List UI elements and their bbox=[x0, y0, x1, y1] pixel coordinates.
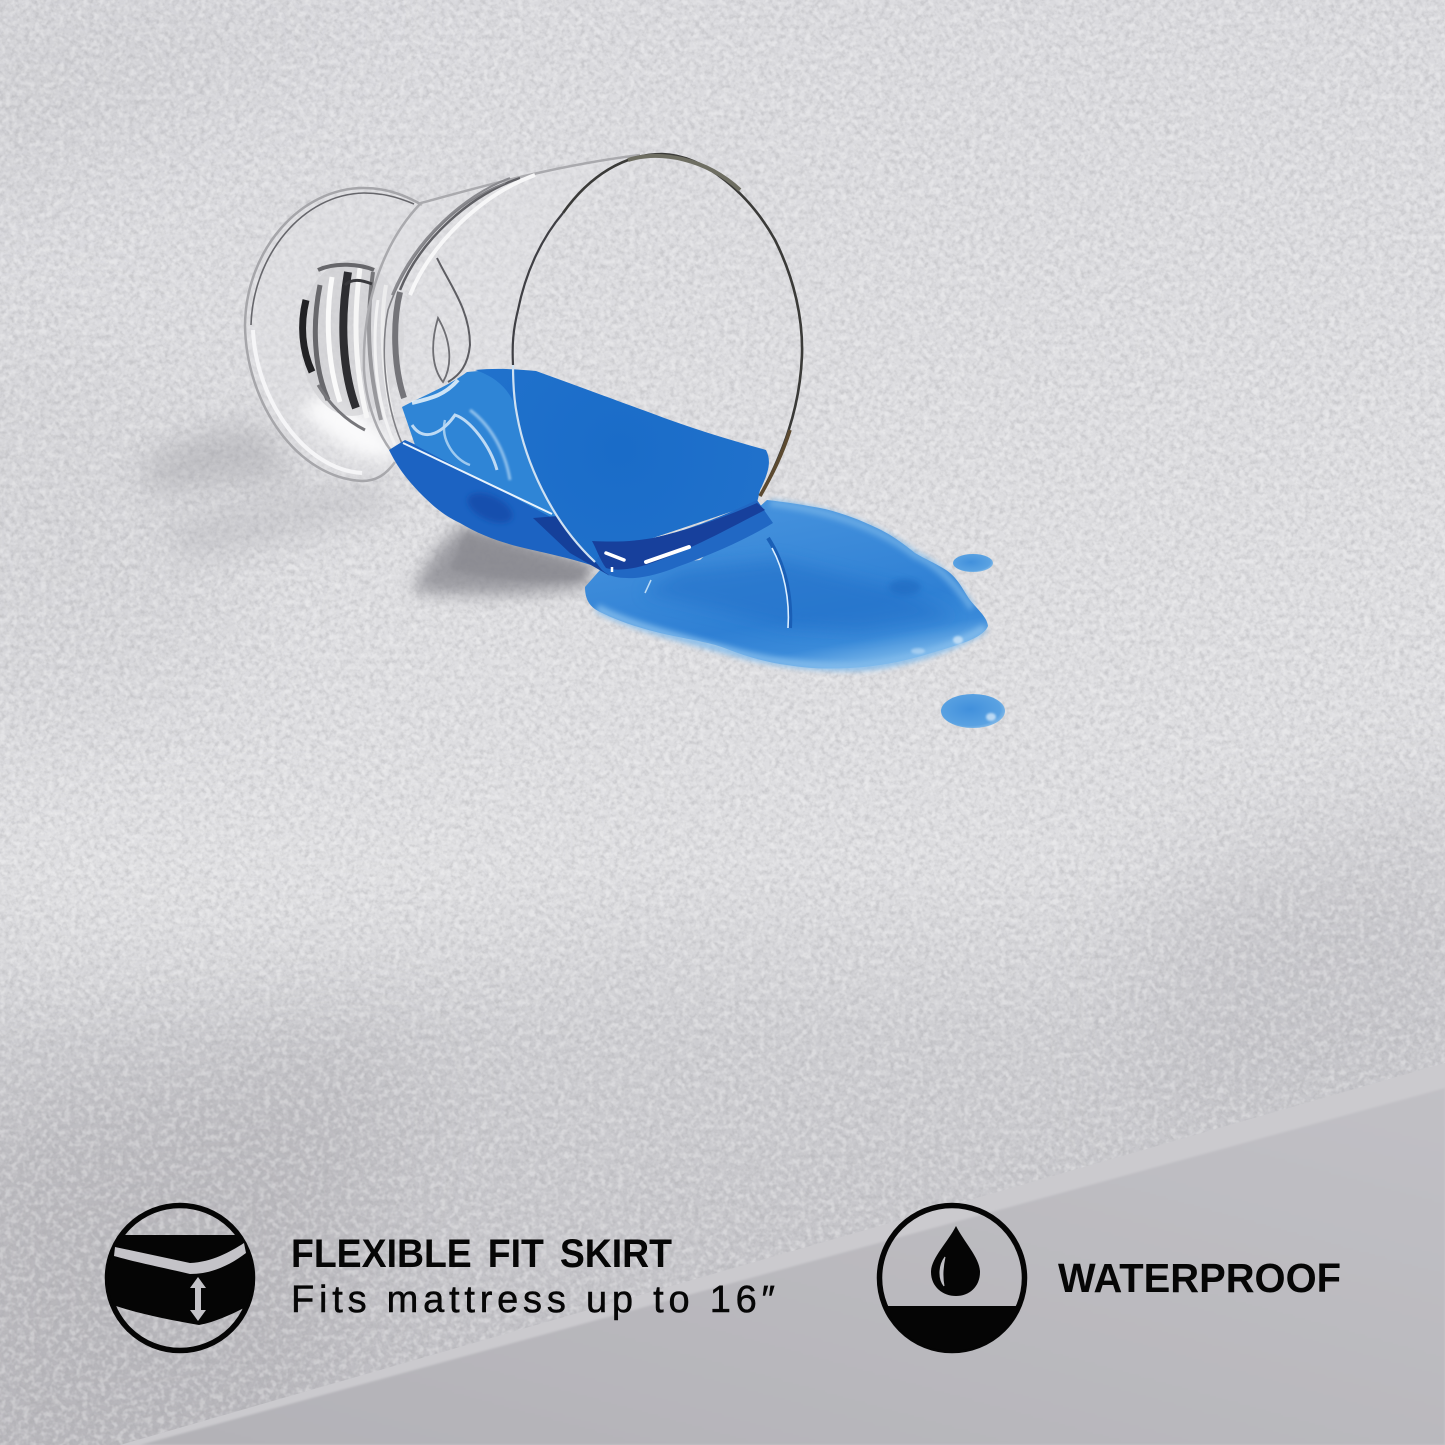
dark wedge under the refraction line bbox=[533, 516, 610, 576]
droplet large bbox=[941, 694, 1005, 728]
specular highlights bbox=[646, 547, 689, 562]
puddle inner shade bbox=[643, 560, 957, 632]
light stripe across mattress bbox=[114, 1243, 246, 1274]
text block: flexible fit skirt: Fits mattress up to 16″ bbox=[291, 1279, 775, 1321]
liquid inside the glass bbox=[475, 369, 769, 562]
icon: flexible fit skirt bbox=[100, 1206, 260, 1350]
glass reflection curve in puddle bbox=[768, 538, 790, 628]
swirl liquid near the glass base bbox=[402, 370, 560, 522]
shadows of the glass bbox=[140, 425, 594, 595]
glass body bbox=[364, 154, 662, 457]
puddle pale rim bbox=[597, 608, 985, 667]
dark meniscus band bbox=[592, 500, 773, 578]
drop highlight bbox=[940, 1257, 945, 1286]
icon arrow bbox=[190, 1277, 206, 1321]
glass stem rings bbox=[300, 260, 404, 430]
refraction line in glass bbox=[403, 443, 552, 514]
text block: flexible fit skirt bbox=[291, 1232, 775, 1321]
dark blue liquid outside glass bbox=[389, 440, 620, 566]
puddle highlights bbox=[953, 636, 963, 644]
text: waterproof: WATERPROOF bbox=[1058, 1255, 1341, 1301]
puddle upper lighter rim bbox=[770, 503, 972, 608]
droplet small bbox=[953, 554, 993, 572]
fitted skirt panel bbox=[120, 1063, 1445, 1445]
glass foot bbox=[245, 188, 422, 481]
icon: waterproof drop bbox=[880, 1206, 1024, 1351]
etched drop motif on glass bbox=[437, 258, 470, 382]
puddle dark spot bbox=[889, 579, 921, 595]
glass rim bbox=[513, 154, 802, 562]
spilled water puddle bbox=[585, 500, 988, 669]
text block: flexible fit skirt: FLEXIBLE FIT SKIRT bbox=[291, 1232, 672, 1276]
water drop bbox=[931, 1226, 980, 1296]
